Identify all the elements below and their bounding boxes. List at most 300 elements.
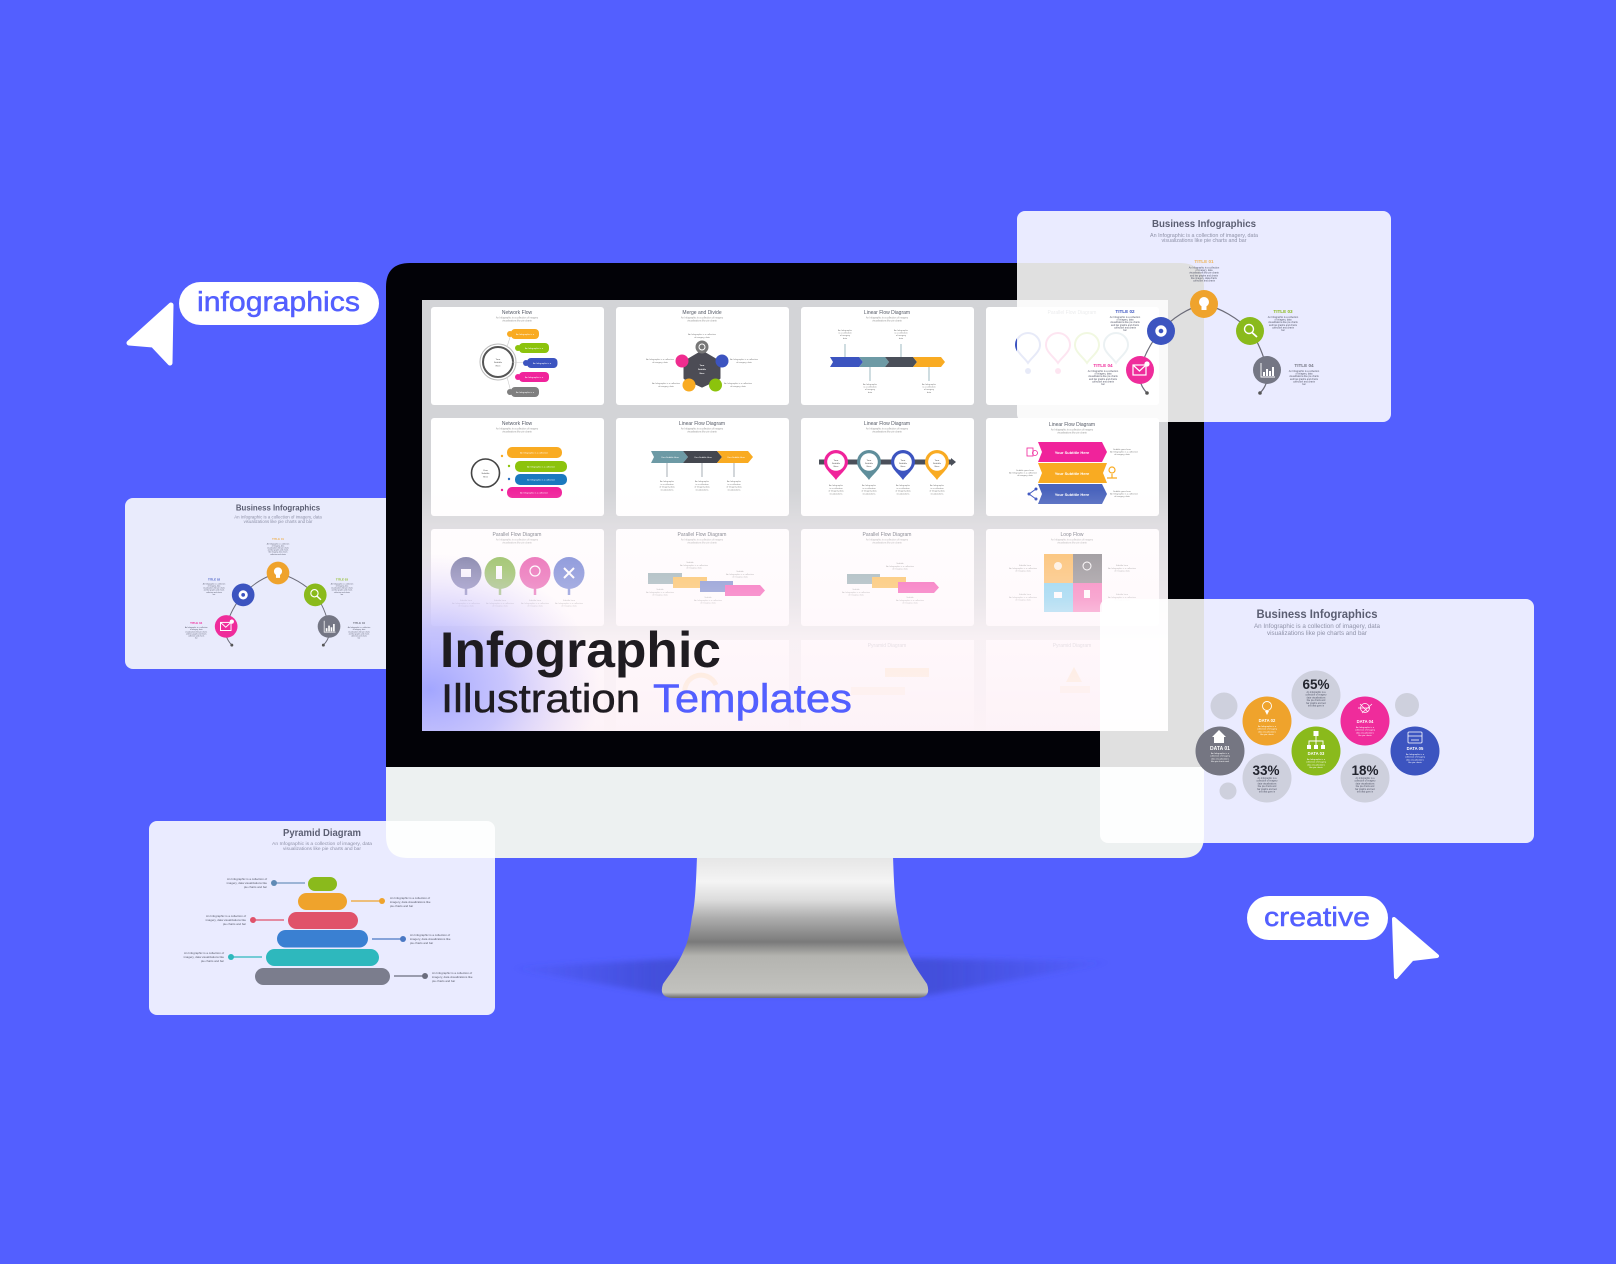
data 03: like pie charts [1309, 766, 1324, 769]
card: linear flow diagram: visualizations like pie charts [872, 319, 903, 322]
card: linear flow 2: Your Subtitle Here [727, 456, 746, 459]
card: parallel flow circles [431, 529, 604, 626]
stat 33%: bar graphs and text [1257, 788, 1277, 791]
card: linear flow pins: An Infographic [829, 485, 843, 487]
pyramid labels: pie charts and bar [410, 941, 433, 945]
card: parallel flow steps 4: of imagery, data [732, 576, 749, 579]
card: linear flow 2: An Infographic is a collection of imagery [681, 428, 723, 430]
card: linear flow arrows: of imagery, data [1114, 453, 1131, 456]
arc diagram left: and bar graphs and charts [186, 632, 207, 635]
arc diagram left: TITLE 02 [208, 577, 220, 581]
card: linear flow pins: visualizations [930, 492, 944, 495]
arc diagram: of imagery, data [1275, 319, 1292, 322]
card: network flow 2: An Infographic is a collection [520, 492, 549, 494]
card: linear flow diagram: data [927, 391, 932, 394]
card: merge and divide: An Infographic is a collection [646, 359, 674, 361]
data 02: DATA 02 [1259, 718, 1276, 723]
arc diagram: collection and charts [1272, 326, 1295, 329]
panel: business infographics left [125, 498, 405, 669]
pyramid labels [184, 877, 473, 983]
card: loop flow: An Infographic is a collection [1108, 596, 1137, 599]
card: linear flow pins: is a collection [896, 487, 910, 490]
data 05: collection of imagery [1405, 756, 1426, 759]
card: linear flow 2: Linear Flow Diagram [679, 421, 725, 427]
card: merge and divide: of imagery, data [694, 336, 711, 339]
card: loop flow [986, 529, 1159, 626]
stat 33%: text that goes in [1259, 790, 1276, 794]
card: linear flow 2 [616, 418, 789, 516]
data 04: like pie charts [1358, 734, 1373, 737]
arc diagram left: and bar graphs and charts [268, 549, 288, 552]
card: linear flow pins: Subtitle [832, 462, 841, 465]
arc diagram: collection and charts [1092, 380, 1115, 383]
data 01: like pie charts and [1211, 760, 1230, 763]
card: linear flow arrows: Linear Flow Diagram [1049, 422, 1095, 428]
stat 18%: An Infographic is a [1355, 778, 1375, 780]
data 01: An Infographic is a [1211, 753, 1229, 755]
arc diagram left: TITLE 03 [336, 577, 348, 581]
card: linear flow diagram [801, 307, 974, 405]
pyramid connectors [228, 880, 428, 979]
card: linear flow 2: Your Subtitle Here [661, 456, 680, 459]
card: linear flow diagram: data [868, 391, 873, 394]
pyramid heading [272, 828, 372, 852]
card: parallel flow steps 3: of imagery, data [848, 594, 865, 597]
card: pins faded: Parallel Flow Diagram [1048, 310, 1096, 316]
data 04: data visualizations [1356, 731, 1375, 734]
card: merge and divide: visualizations like pie charts [687, 319, 718, 322]
card: linear flow diagram: data [899, 337, 904, 340]
card: parallel flow steps 4: visualizations like pie charts [687, 541, 718, 544]
title line 2: Illustration [441, 677, 640, 721]
bubbles heading: An Infographic is a collection of imagery, data [1254, 623, 1381, 630]
pyramid labels: imagery, data visualizations like [432, 975, 473, 979]
stat 65%: data visualizations [1307, 696, 1326, 699]
card: merge and divide: An Infographic is a collection [688, 334, 716, 336]
arc diagram: like imagery, data charts [1191, 277, 1218, 280]
data 05: like pie charts [1408, 761, 1423, 764]
arc diagram: TITLE 01 [1194, 259, 1214, 264]
monitor chin [386, 760, 1204, 858]
card: linear flow pins: Your [901, 460, 905, 462]
card: pins faded [986, 307, 1159, 405]
stat 18%: bar graphs and text [1355, 788, 1375, 791]
stat 18%: text that goes in [1357, 790, 1374, 794]
card: linear flow diagram: data [843, 337, 848, 340]
card: network flow 2: visualizations like pie charts [502, 430, 533, 433]
arc diagram: and bar graphs and charts [1190, 274, 1219, 277]
icon: cursor left [129, 305, 171, 363]
card: linear flow pins: Here [901, 466, 906, 468]
card: linear flow diagram: An Infographic is a collection of imagery [866, 316, 908, 320]
data 02: collection of imagery [1257, 728, 1278, 731]
card: linear flow pins: Your [867, 460, 871, 462]
panel: business infographics bubbles [1100, 599, 1534, 843]
card: linear flow pins: An Infographic [896, 485, 910, 487]
monitor [386, 263, 1204, 858]
row 4 cards: Pyramid Diagram [1053, 643, 1091, 649]
card: merge and divide: of imagery, data [736, 361, 753, 364]
card: linear flow pins: is a collection [829, 487, 843, 490]
arc diagram: An Infographic is a collection [1189, 266, 1219, 270]
card: linear flow 2: is a collection [660, 483, 674, 486]
arc diagram left: bar [341, 594, 344, 596]
arc diagram left: An Infographic is a collection [331, 583, 353, 585]
arc diagram: Business Infographics [1152, 219, 1256, 230]
data 05: data visualizations [1406, 758, 1425, 761]
card: loop flow: Subtitle here [1116, 565, 1128, 567]
pyramid labels: pie charts and bar [244, 885, 267, 889]
arc diagram: visualizations like pie charts [1289, 375, 1320, 378]
card: parallel flow steps 4: of imagery, data [686, 567, 703, 570]
card: loop flow: An Infographic is a collection [1009, 596, 1038, 599]
arc diagram: visualizations like pie charts [1088, 375, 1119, 378]
card: linear flow 2: Your Subtitle Here [694, 456, 713, 459]
arc diagram: bar [1281, 329, 1285, 332]
data 02: data visualizations [1258, 730, 1277, 733]
pyramid labels: An Infographic is a collection of [432, 971, 472, 975]
card: network flow: An Infographic is a [516, 333, 535, 336]
card: linear flow pins: Subtitle [899, 462, 908, 465]
pill: infographics: infographics [197, 286, 360, 317]
card: loop flow: An Infographic is a collection [1009, 567, 1038, 570]
card: network flow: An Infographic is a [533, 362, 552, 365]
arc diagram: An Infographic is a collection [1289, 370, 1319, 373]
card: parallel flow steps 3: An Infographic is a collection [842, 591, 871, 594]
card: parallel flow circles: An Infographic is a collection [555, 602, 584, 605]
arc diagram: An Infographic is a collection [1110, 316, 1140, 319]
card: linear flow diagram: An Infographic [894, 330, 908, 332]
card: linear flow 2: visualizations like pie charts [687, 430, 718, 433]
card: network flow 2: An Infographic is a collection [527, 478, 556, 482]
card: linear flow diagram: An Infographic [838, 330, 852, 332]
bubbles heading: Business Infographics [1256, 607, 1378, 621]
card: linear flow pins: is a collection [930, 487, 944, 490]
data 03: data visualizations [1307, 763, 1326, 766]
card: merge and divide: An Infographic is a collection [730, 359, 758, 361]
card: merge and divide: An Infographic is a collection [724, 383, 752, 385]
row 3 cards [431, 529, 1159, 626]
data 05 [1390, 726, 1440, 776]
card: merge and divide: Here [700, 373, 705, 375]
arc diagram left: visualizations like pie charts [203, 587, 225, 590]
card: parallel flow steps 3: An Infographic is a collection [896, 599, 925, 602]
arc diagram: and bar graphs and charts [1089, 378, 1118, 381]
monitor stand [662, 856, 928, 998]
pyramid labels: imagery, data visualizations like [227, 881, 267, 885]
pyramid labels: An Infographic is a collection of [227, 877, 267, 881]
stat 65%: bar graphs and text [1306, 702, 1326, 705]
card: merge and divide: An Infographic is a collection of imagery [681, 316, 723, 320]
card: network flow: Your [496, 359, 500, 361]
arc diagram: and bar graphs and charts [1269, 324, 1298, 327]
arc diagram left: of imagery, data [272, 544, 284, 547]
card: linear flow 2: of imagery data [694, 486, 710, 489]
card: parallel flow circles: of imagery, data [527, 605, 544, 608]
arc diagram left: like imagery, data charts [268, 551, 288, 554]
card: linear flow diagram: of imagery [840, 334, 851, 337]
arc diagram left: collection and charts [270, 553, 286, 556]
card: linear flow 2: is a collection [695, 483, 709, 486]
data 05: An Infographic is a [1406, 754, 1424, 756]
pyramid bars [255, 877, 390, 985]
stat 65%: text that goes in [1308, 704, 1325, 708]
stat 18%: collection of imagery [1355, 780, 1376, 783]
pyramid labels: An Infographic is a collection of [184, 951, 224, 955]
pyramid labels: pie charts and bar [432, 979, 455, 983]
stat 33%: 33% [1252, 763, 1280, 778]
arc diagram: bar [1302, 383, 1306, 386]
card: linear flow diagram: is a collection [894, 332, 908, 335]
data 04: collection of imagery [1355, 729, 1376, 732]
card: linear flow arrows: of imagery, data [1017, 474, 1034, 477]
stand shadow [510, 958, 1112, 995]
card: linear flow pins: Here [935, 466, 940, 468]
data 05: DATA 05 [1407, 746, 1424, 751]
data 04 [1340, 696, 1390, 746]
card: linear flow pins: An Infographic is a collection of imagery [866, 428, 908, 430]
card: network flow 2: An Infographic is a collection of imagery [496, 428, 538, 430]
card: parallel flow circles: Subtitle here [494, 600, 506, 602]
arc diagram: collection and charts [1114, 326, 1137, 329]
card: linear flow arrows: Subtitle goes here [1113, 491, 1131, 493]
card: linear flow arrows: Subtitle goes here [1016, 470, 1034, 472]
card: parallel flow steps 4: Subtitle [686, 562, 694, 564]
pill: creative [1247, 896, 1388, 940]
card: linear flow pins: of imagery data [861, 490, 877, 493]
card: linear flow 2: visualizations [695, 488, 709, 491]
stat 33%: An Infographic is a [1257, 778, 1277, 780]
card: loop flow: An Infographic is a collection of imagery [1051, 538, 1093, 542]
card: network flow 2: Subtitle [481, 472, 490, 475]
pyramid labels: An Infographic is a collection of [206, 914, 246, 918]
pyramid labels: imagery, data visualizations like [410, 937, 451, 941]
card: linear flow pins: visualizations [829, 492, 843, 495]
row 4 cards: Pyramid Diagram [868, 643, 906, 649]
arc diagram: of imagery, data [1196, 269, 1213, 272]
card: parallel flow circles: of imagery, data [561, 605, 578, 608]
card: network flow 2: Here [483, 476, 489, 478]
title line 1: Infographic [440, 622, 721, 678]
card: network flow 2 [431, 418, 604, 516]
card: linear flow pins: Here [834, 466, 839, 468]
arc diagram left: collection and charts [351, 635, 367, 638]
card: parallel flow steps 4: of imagery, data [700, 602, 717, 605]
data 04: An Infographic is a [1356, 727, 1374, 729]
card: network flow: An Infographic is a collection of imagery [496, 316, 538, 320]
card: linear flow arrows: visualizations like pie charts [1057, 431, 1088, 434]
arc diagram: and bar graphs and charts [1111, 324, 1140, 327]
card: linear flow pins: Your [935, 460, 939, 462]
arc diagram: bar [1123, 329, 1127, 332]
card: linear flow pins: Here [867, 466, 872, 468]
card: parallel flow steps 3: Subtitle [906, 597, 914, 599]
arc diagram left: visualizations like pie charts [331, 587, 353, 590]
pyramid labels: pie charts and bar [201, 959, 224, 963]
card: linear flow diagram: An Infographic [922, 384, 936, 386]
card: parallel flow circles: Subtitle here [563, 600, 575, 602]
arc diagram left: visualizations like pie charts [267, 546, 289, 549]
card: merge and divide: Merge and Divide [682, 310, 722, 316]
data 01 [1196, 726, 1244, 776]
card: network flow: An Infographic is a [525, 347, 544, 350]
arc diagram left: Business Infographics [236, 503, 320, 513]
stat 18% [1340, 754, 1390, 802]
card: loop flow: Subtitle here [1116, 594, 1128, 596]
arc diagram left: An Infographic is a collection of imagery, data [234, 515, 322, 520]
card: linear flow diagram: of imagery [865, 388, 876, 391]
arc diagram: TITLE 04 [1294, 363, 1314, 368]
card: linear flow diagram: of imagery [924, 388, 935, 391]
bubbles heading [1254, 607, 1381, 637]
arc diagram left: of imagery, data [336, 584, 348, 587]
card: linear flow pins: visualizations [862, 492, 876, 495]
card: parallel flow steps 3: Parallel Flow Diagram [863, 532, 911, 538]
pyramid labels: imagery, data visualizations like [390, 900, 431, 904]
arc diagram left: of imagery, data [190, 628, 202, 631]
title highlight: Templates [653, 677, 852, 721]
arc diagram: TITLE 03 [1273, 309, 1293, 314]
card: network flow: visualizations like pie charts [502, 319, 533, 322]
card: linear flow arrows [986, 418, 1159, 516]
stat 65% [1292, 670, 1340, 720]
arc diagram left: and bar graphs and charts [349, 632, 369, 635]
card: parallel flow steps 4: of imagery, data [652, 594, 669, 597]
card: loop flow: Subtitle here [1019, 594, 1031, 596]
card: linear flow arrows: Your Subtitle Here [1055, 471, 1090, 476]
card: linear flow arrows: Your Subtitle Here [1055, 492, 1090, 497]
card: linear flow diagram: An Infographic [863, 384, 877, 386]
card: merge and divide: Your [700, 365, 704, 367]
card: network flow 2: Network Flow [502, 421, 533, 427]
row 2 cards [431, 418, 1159, 516]
arc diagram left: An Infographic is a collection [348, 627, 370, 629]
card: parallel flow circles: Parallel Flow Diagram [493, 532, 541, 538]
card: linear flow arrows: An Infographic is a collection [1110, 493, 1139, 496]
arc diagram: visualizations like pie charts [1110, 321, 1141, 324]
card: parallel flow steps 4: An Infographic is a collection [726, 573, 755, 576]
stat 65%: like pie charts and [1307, 699, 1326, 702]
card: linear flow arrows: An Infographic is a collection [1009, 472, 1038, 475]
screen blue glow [422, 540, 662, 731]
arc diagram left: An Infographic is a collection [267, 543, 289, 545]
arc diagram: An Infographic is a collection of imagery, data [1150, 233, 1258, 239]
pyramid heading: Pyramid Diagram [283, 828, 361, 839]
data 03 [1292, 726, 1340, 776]
card: linear flow pins: visualizations [896, 492, 910, 495]
card: loop flow: of imagery, data [1015, 570, 1032, 573]
card: parallel flow steps 4 [616, 529, 789, 626]
arc diagram left: bar [358, 638, 361, 640]
card: loop flow: An Infographic is a collection [1108, 567, 1137, 570]
card: network flow: Subtitle [494, 361, 503, 364]
card: parallel flow steps 3: An Infographic is a collection [886, 565, 915, 568]
card: parallel flow steps 4: Subtitle [736, 571, 744, 573]
arc diagram [1088, 219, 1320, 395]
card: parallel flow circles: visualizations like pie charts [502, 541, 533, 544]
arc diagram left: collection and charts [334, 591, 350, 594]
card: parallel flow circles: An Infographic is a collection [452, 602, 481, 605]
arc diagram left: bar [213, 594, 216, 596]
card: merge and divide: An Infographic is a collection [652, 383, 680, 385]
panel: pyramid diagram [149, 821, 495, 1015]
card: parallel flow circles: of imagery, data [492, 605, 509, 608]
arc diagram left: An Infographic is a collection [185, 627, 207, 629]
card: network flow: Here [496, 365, 501, 367]
arc diagram left: collection and charts [206, 591, 222, 594]
card: network flow: An Infographic is a [516, 391, 535, 394]
stat 65%: An Infographic is a [1306, 692, 1326, 694]
pyramid labels: imagery, data visualizations like [184, 955, 224, 959]
pyramid labels: imagery, data visualizations like [206, 918, 246, 922]
arc diagram left: of imagery, data [208, 584, 220, 587]
data 03: An Infographic is a [1307, 759, 1325, 761]
row 1 cards [431, 307, 1159, 405]
card: parallel flow steps 3: visualizations like pie charts [872, 541, 903, 544]
stat 33%: data visualizations [1258, 782, 1277, 785]
card: parallel flow steps 3: of imagery, data [892, 568, 909, 571]
data 01: DATA 01 [1210, 746, 1230, 752]
bubble chart [1196, 670, 1440, 802]
card: linear flow 2: is a collection [727, 483, 741, 486]
card: parallel flow circles: An Infographic is a collection [521, 602, 550, 605]
stat 18%: data visualizations [1356, 782, 1375, 785]
card: parallel flow steps 4: Parallel Flow Diagram [678, 532, 726, 538]
arc diagram left: and bar graphs and charts [332, 589, 352, 592]
data 03: collection of imagery [1306, 761, 1327, 764]
screen [422, 300, 1168, 731]
data 03: DATA 03 [1308, 751, 1325, 756]
arc diagram left: collection and charts [188, 635, 204, 638]
card: parallel flow steps 4: An Infographic is a collection of imagery [681, 538, 723, 542]
card: loop flow: of imagery, data [1114, 570, 1131, 573]
card: linear flow arrows: Your Subtitle Here [1055, 450, 1090, 455]
card: loop flow: Loop Flow [1060, 532, 1084, 538]
arc diagram: of imagery, data [1117, 319, 1134, 322]
card: linear flow pins: Subtitle [865, 462, 874, 465]
card: linear flow diagram: Linear Flow Diagram [864, 310, 910, 316]
card: linear flow diagram: is a collection [863, 386, 877, 389]
card: merge and divide: of imagery, data [730, 385, 747, 388]
card: linear flow arrows: Subtitle goes here [1113, 449, 1131, 451]
card: parallel flow steps 4: An Infographic is a collection [680, 564, 709, 567]
card: linear flow 2: of imagery data [659, 486, 675, 489]
pill: infographics [179, 282, 379, 325]
stat 33%: like pie charts and [1258, 785, 1277, 788]
card: linear flow 2: visualizations [727, 488, 741, 491]
arc diagram left: visualizations like pie charts [348, 630, 370, 633]
card: parallel flow circles: of imagery, data [458, 605, 475, 608]
arc diagram left: bar [195, 638, 198, 640]
card: linear flow pins: Your [834, 460, 838, 462]
arc diagram left: TITLE 04 [353, 621, 365, 625]
arc diagram left: visualizations like pie charts and bar [244, 519, 313, 524]
arc diagram: visualizations like pie charts [1189, 272, 1220, 275]
card: linear flow 2: An Infographic [660, 481, 674, 483]
card: network flow: Network Flow [502, 310, 533, 316]
card: linear flow pins: of imagery data [895, 490, 911, 493]
arc diagram left: of imagery, data [353, 628, 365, 631]
pyramid labels: pie charts and bar [390, 904, 413, 908]
card: parallel flow steps 3: of imagery, data [902, 602, 919, 605]
card: linear flow 2: An Infographic [695, 481, 709, 483]
card: linear flow arrows: An Infographic is a collection [1110, 451, 1139, 454]
arc diagram: of imagery, data [1095, 373, 1112, 376]
card: network flow [431, 307, 604, 405]
card: parallel flow circles: An Infographic is a collection of imagery [496, 538, 538, 542]
arc diagram left: TITLE 04 [190, 621, 203, 625]
data 02: An Infographic is a [1258, 726, 1276, 728]
